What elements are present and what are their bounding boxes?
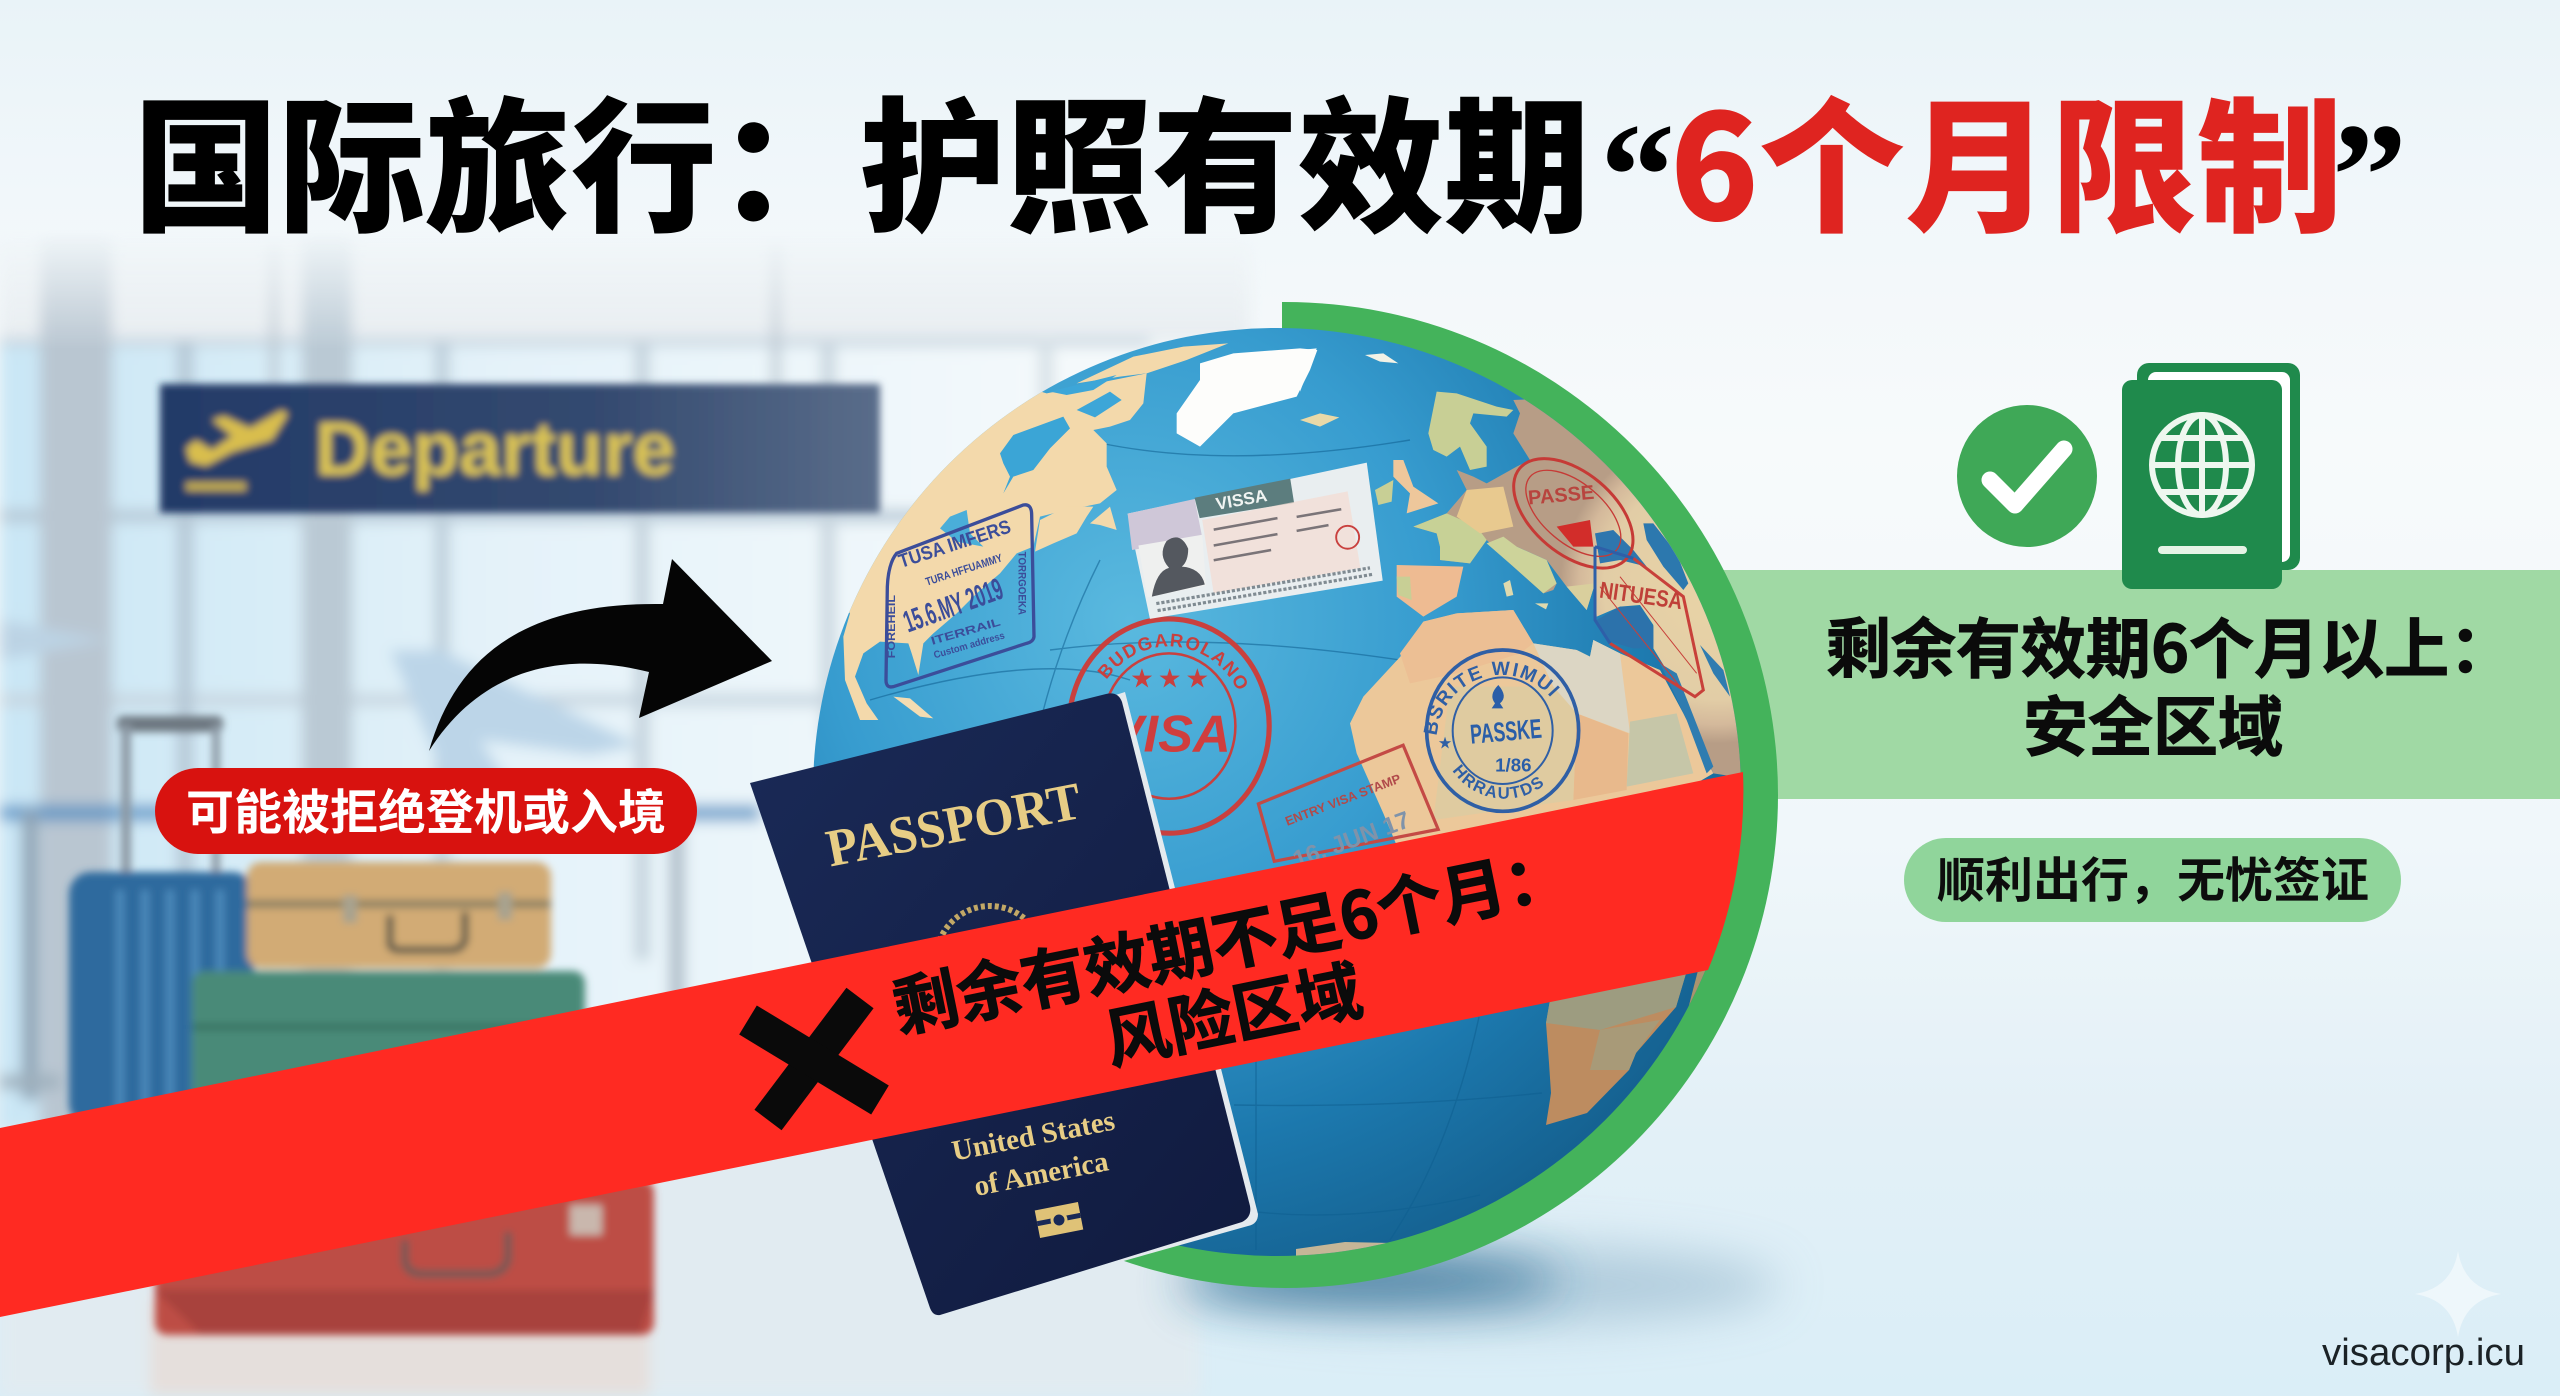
callout pill: smooth travel: 顺利出行，无忧签证 [1937, 841, 2369, 911]
continents: southern africa [1296, 970, 1706, 1256]
passport country: United States [949, 1105, 1117, 1168]
globe shadow [1180, 1245, 1780, 1325]
risk zone text: 剩余有效期不足6个月： [884, 822, 1577, 1051]
stamp: red visa circle: ★ ★ ★ [1131, 666, 1208, 691]
stamp: 2019: TURA HFFUAMMY [924, 552, 1004, 589]
stamp: june [1258, 745, 1438, 874]
title: “ [1600, 93, 1675, 259]
passport country [949, 1105, 1117, 1203]
title: 6个月限制 [1670, 52, 2343, 263]
stamp: blue passport circle: BSRITE WIMUI [1424, 662, 1560, 735]
stamp: red oval: PASSE [1527, 482, 1595, 510]
globe grid lines [870, 440, 1542, 1250]
title: 护照有效期 [860, 52, 1590, 263]
luggage [69, 716, 654, 1335]
stamp: 2019: FOREHEIL [886, 594, 898, 658]
passport title: PASSPORT [822, 772, 1086, 878]
africa [1350, 610, 1713, 853]
red sea and gulf [1660, 663, 1713, 773]
continents: americas [843, 343, 1318, 720]
iceland [1300, 413, 1339, 427]
stamp tree icon [1492, 685, 1504, 708]
stamp: red oval [1512, 457, 1634, 570]
stamp: 2019: TORRGOEKA [1015, 552, 1027, 615]
title [133, 52, 2407, 263]
stamp: june: ENTRY VISA STAMP [1283, 771, 1403, 829]
sign text: Departure [315, 407, 675, 492]
departure sign [160, 384, 880, 513]
icon: green check [1957, 405, 2097, 547]
seas [1595, 530, 1647, 567]
safe zone text: 剩余有效期6个月以上： [1826, 597, 2514, 691]
eurasia [1414, 400, 1740, 776]
green safe zone band [1700, 570, 2560, 799]
stamp: red and blue hexagon: NITUESA [1598, 577, 1684, 614]
stamp: red visa circle [1068, 616, 1272, 836]
stamp: red visa circle: VISA [1109, 706, 1231, 764]
continents: europe, africa, asia [1300, 348, 1740, 843]
callout pill: refused boarding: 可能被拒绝登机或入境 [186, 773, 666, 843]
passport [750, 692, 1258, 1315]
passport country: of America [971, 1145, 1112, 1203]
stamp: blue passport circle: ★ [1438, 735, 1452, 750]
passport emblem [936, 906, 1044, 1014]
globe [814, 328, 1740, 1256]
arrow [429, 559, 772, 751]
red risk band [0, 772, 1743, 1317]
stamp: blue passport circle [1424, 648, 1580, 814]
stamp: june: 16. JUN 17 [1289, 807, 1414, 874]
stamp: red and blue hexagon [1595, 547, 1703, 697]
scandinavia [1428, 392, 1513, 470]
blurred airport background [0, 230, 1250, 1396]
stamp: 2019: TUSA IMFERS [896, 517, 1014, 573]
spain [1397, 565, 1463, 617]
hudson bay [1000, 417, 1070, 493]
stamp: blue passport circle: 1/86 [1495, 755, 1531, 776]
safe zone text: 安全区域 [2023, 675, 2283, 769]
risk zone text: 风险区域 [1096, 939, 1369, 1083]
visa card: VISSA [1214, 485, 1269, 514]
green ring arc [1124, 302, 1778, 1288]
stamp: 2019 [886, 505, 1034, 687]
icon: plane [186, 410, 288, 466]
greenland [1177, 348, 1317, 447]
uk and ireland [1393, 460, 1438, 513]
stamp: 2019: 15.6.MY 2019 [899, 572, 1008, 639]
passport chip symbol [1035, 1202, 1083, 1238]
icon: green passport [2122, 363, 2300, 589]
stamp: 2019: ITERRAIL [930, 616, 1002, 648]
title: ” [2332, 93, 2407, 259]
visa photo silhouette [1152, 537, 1205, 597]
stamp: red visa circle: BUDGAROLANOR [1097, 634, 1247, 689]
title: 国际旅行： [133, 52, 863, 263]
stamp: 2019: Custom address [933, 630, 1006, 661]
stamp: blue passport circle: PASSKE [1469, 713, 1543, 750]
stamp: blue passport circle: HRRAUTDS [1452, 764, 1543, 799]
visa card [1128, 463, 1383, 619]
icon: sparkle watermark [2415, 1251, 2501, 1337]
safe zone text [1826, 597, 2514, 769]
watermark text: visacorp.icu [2322, 1332, 2525, 1374]
icon: black x [748, 998, 880, 1120]
